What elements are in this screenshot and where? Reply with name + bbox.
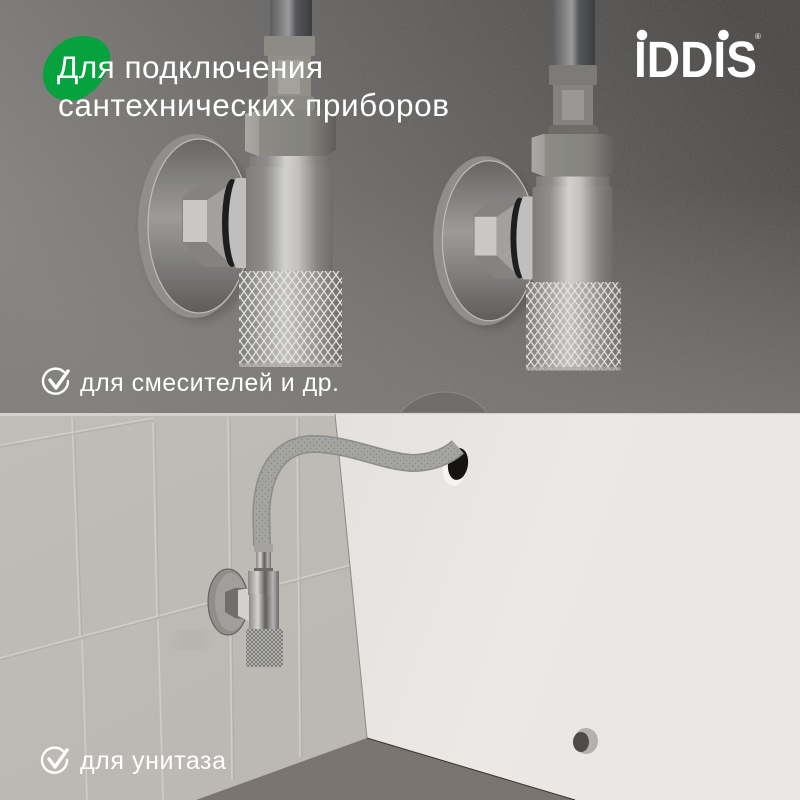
white panel	[335, 414, 800, 800]
feature: for mixers	[43, 369, 339, 397]
left angle valve	[138, 110, 342, 367]
left hose and connector	[264, 0, 315, 111]
icon: check mark	[43, 369, 68, 394]
partial flange at the photo bottom	[400, 392, 487, 413]
brand logo: ®	[755, 32, 761, 41]
title: Для подключения	[57, 49, 323, 85]
floor	[196, 738, 575, 800]
flexible hose	[261, 444, 458, 546]
label: for mixers: для смесителей и др.	[80, 369, 339, 397]
icon: check mark	[42, 748, 67, 773]
feature: for toilet	[42, 747, 226, 775]
right angle valve	[433, 134, 621, 370]
title: сантехнических приборов	[58, 87, 449, 123]
mounting bolt	[573, 728, 598, 754]
wall outlet hole	[441, 447, 470, 487]
brand logo: IDDIS	[634, 31, 757, 88]
panel: bottom photo tile wall	[0, 413, 800, 800]
small angle valve	[208, 544, 283, 667]
right hose and connector	[548, 0, 598, 137]
label: for toilet: для унитаза	[80, 747, 226, 775]
green accent blob	[43, 36, 110, 101]
panel: top photo wall	[0, 0, 800, 413]
